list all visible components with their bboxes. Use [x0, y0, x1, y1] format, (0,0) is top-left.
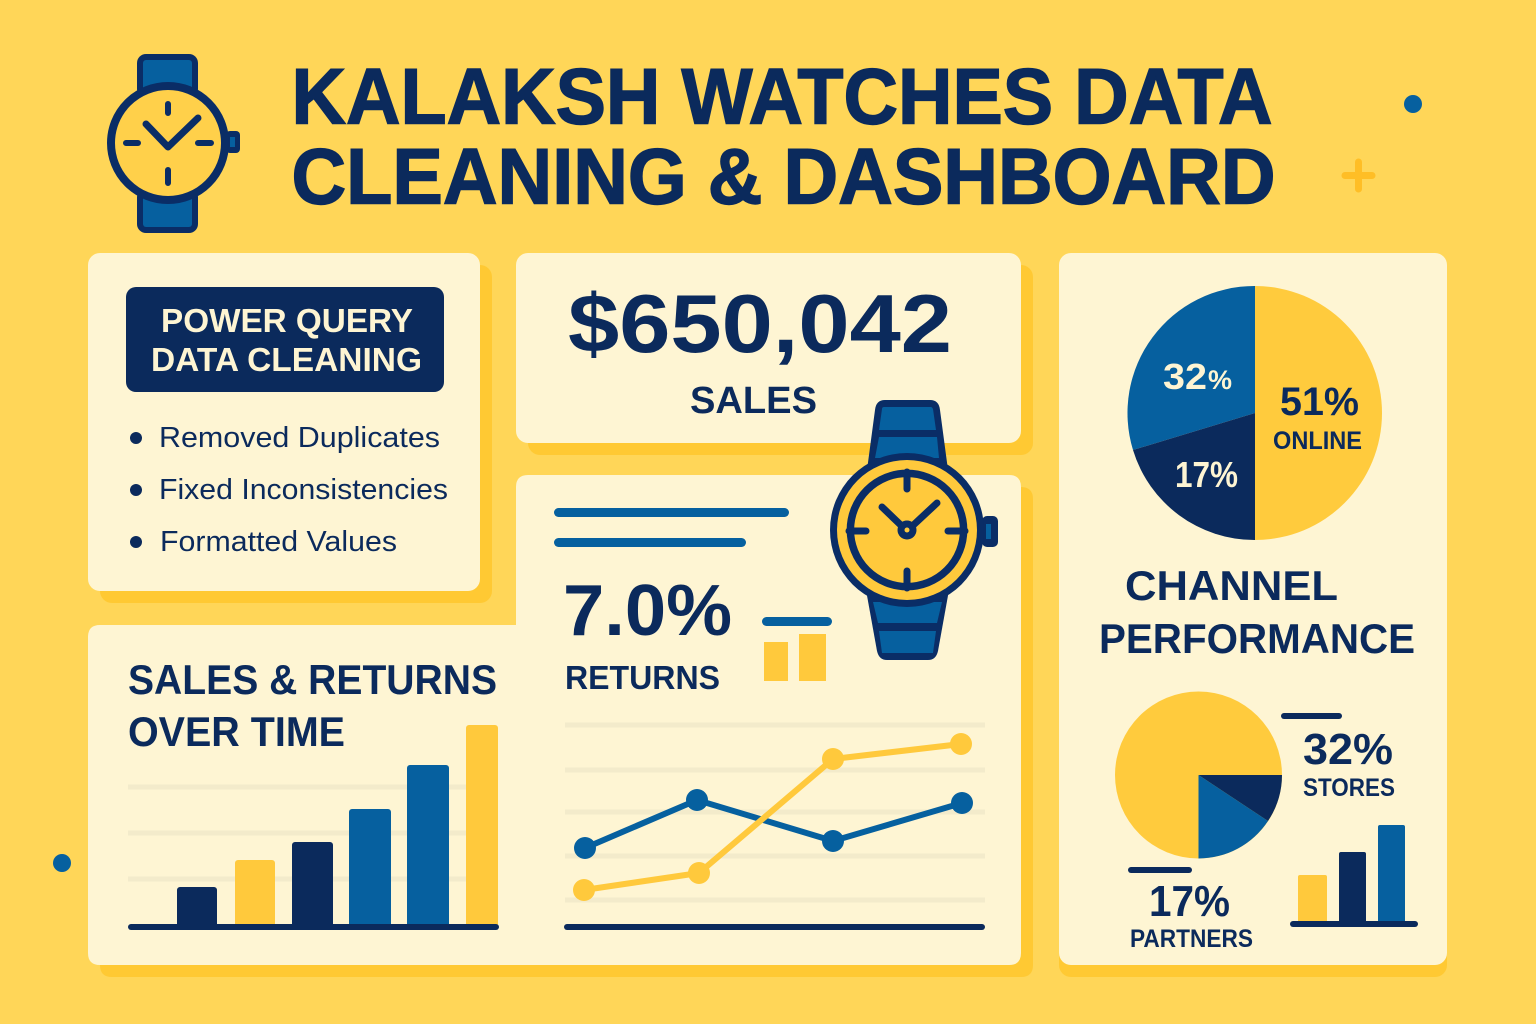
bullet list: Removed Duplicates	[159, 422, 440, 454]
decorative header lines	[554, 508, 789, 547]
pie chart: channel share: %	[1208, 365, 1232, 395]
pie chart: channel share	[1127, 286, 1382, 540]
heading: sales and returns	[128, 656, 497, 755]
bullet list: Fixed Inconsistencies	[159, 474, 448, 506]
title: CLEANING & DASHBOARD	[292, 132, 1276, 220]
heading: sales and returns: SALES & RETURNS	[128, 656, 497, 703]
pie chart: channel share: 32	[1163, 356, 1207, 397]
icon: mini bars	[762, 617, 832, 681]
callout: stores	[1281, 713, 1395, 802]
title	[292, 52, 1276, 220]
returns label: RETURNS	[565, 659, 720, 696]
line chart: returns trend	[564, 725, 985, 930]
heading: sales and returns: OVER TIME	[128, 708, 345, 755]
sales label: SALES	[690, 380, 817, 422]
bar chart: channel mini	[1290, 825, 1418, 927]
pie chart: channel share: ONLINE	[1273, 427, 1362, 455]
callout: partners: 17%	[1149, 877, 1230, 926]
callout: partners: PARTNERS	[1130, 925, 1253, 953]
icon: header watch	[111, 54, 240, 233]
callout: stores: STORES	[1303, 774, 1395, 802]
heading badge: power query: POWER QUERY	[161, 302, 413, 339]
heading: channel performance	[1099, 562, 1415, 662]
callout: partners	[1128, 867, 1253, 953]
panel: sales and returns over time	[88, 475, 1033, 977]
bullet list	[130, 422, 448, 558]
pie chart: channel share: 17%	[1175, 454, 1238, 495]
callout: stores: 32%	[1303, 725, 1393, 774]
heading badge: power query	[126, 287, 444, 392]
panel: channel performance	[1059, 253, 1447, 977]
panel: total sales	[516, 253, 1033, 455]
heading: channel performance: PERFORMANCE	[1099, 615, 1415, 662]
pie chart: secondary	[1115, 692, 1282, 858]
decoration: plus	[1345, 162, 1372, 189]
heading: channel performance: CHANNEL	[1125, 562, 1338, 609]
bar chart: sales	[128, 725, 499, 930]
icon: large watch	[830, 400, 998, 660]
sales value: $650,042	[568, 277, 952, 370]
decoration: top dot	[1404, 95, 1422, 113]
bullet list: Formatted Values	[160, 526, 397, 558]
title: KALAKSH WATCHES DATA	[292, 52, 1272, 140]
panel: power query data cleaning	[88, 253, 492, 603]
pie chart: channel share: 51%	[1280, 380, 1359, 424]
decoration: left dot	[53, 854, 71, 872]
returns value: 7.0%	[563, 571, 732, 651]
heading badge: power query: DATA CLEANING	[151, 341, 422, 378]
